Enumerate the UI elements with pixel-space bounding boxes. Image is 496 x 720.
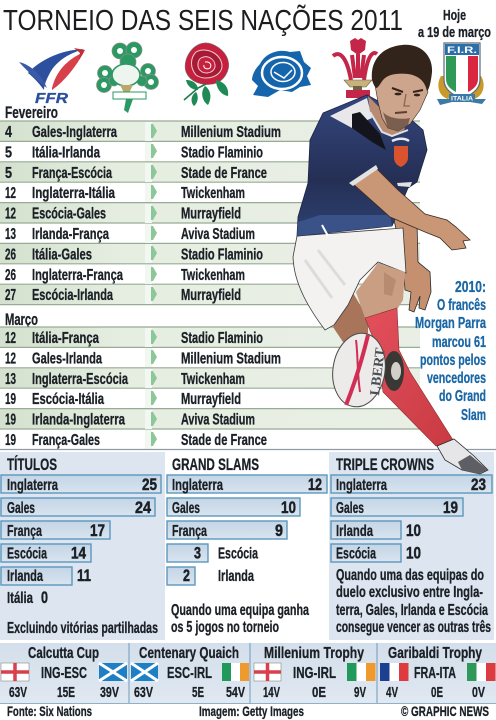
boot: [437, 439, 488, 474]
row: 19 Irlanda-Inglaterra: 19: [5, 412, 16, 429]
row: 13 Irlanda-França: [5, 226, 255, 243]
bar: Escócia 3: Escócia: [218, 546, 258, 562]
logo: Wales feathers: [333, 38, 377, 98]
row: 12 Gales-Irlanda: [5, 350, 281, 367]
note: triple crowns: [336, 567, 491, 636]
row: 26 Itália-Gales: Itália-Gales: [32, 246, 92, 263]
row: 12 Itália-França: [5, 330, 263, 347]
trophy: Centenary Quaich: 63V: [134, 684, 153, 701]
trophy: Centenary Quaich: 54V: [226, 684, 245, 701]
row: 12 Itália-França: Itália-França: [32, 330, 99, 347]
row: 5 Itália-Irlanda: 5: [5, 144, 12, 161]
row: 26 Itália-Gales: Stadio Flaminio: [181, 246, 263, 263]
bar: Gales 19: [331, 498, 463, 517]
note: grand slams: Quando uma equipa ganha: [171, 602, 309, 619]
bar: Inglaterra 23: [331, 475, 492, 494]
row: 27 Escócia-Irlanda: Escócia-Irlanda: [32, 287, 113, 304]
eyes, nose and mouth: [392, 88, 423, 113]
row: 13 Irlanda-França: Irlanda-França: [32, 226, 109, 243]
row: 12 Escócia-Gales: Murrayfield: [181, 206, 241, 223]
row: 26 Inglaterra-França: Twickenham: [181, 267, 245, 284]
bar: Gales 24: Gales: [7, 500, 35, 517]
row: 13 Irlanda-França: Aviva Stadium: [181, 226, 255, 243]
trophy: Centenary Quaich: Centenary Quaich: [139, 645, 239, 662]
trophy: Centenary Quaich: [131, 645, 249, 701]
row: 19 França-Gales: [5, 432, 267, 449]
callout: Morgan Parra: [415, 279, 486, 424]
trophy: Millenium Trophy: ING-IRL: [293, 665, 336, 682]
bar: Gales 10: [167, 498, 300, 517]
row: 12 Escócia-Gales: 12: [5, 206, 16, 223]
heading: Março: Março: [5, 310, 38, 329]
date note: Hoje: [443, 8, 466, 24]
trophy: Garibaldi Trophy: FRA-ITA: [414, 665, 456, 682]
trophy: Calcutta Cup: Calcutta Cup: [28, 645, 99, 662]
standing leg: [333, 293, 368, 342]
logo: France FFR: [19, 48, 85, 107]
bar: Inglaterra 25: Inglaterra: [7, 477, 58, 494]
trophy: Garibaldi Trophy: 0V: [472, 684, 485, 701]
bar: Irlanda 10: [331, 521, 421, 540]
bar: Irlanda 2: Irlanda: [218, 568, 254, 585]
shorts: [293, 228, 406, 330]
bar: Inglaterra 23: Inglaterra: [336, 477, 387, 494]
note: titulos: Excluindo vitórias partilhadas: [7, 620, 158, 637]
bar: Gales 19: Gales: [336, 500, 364, 517]
row: 19 Escócia-Itália: Escócia-Itália: [32, 391, 104, 408]
row: 5 França-Escócia: Stade de France: [181, 165, 267, 182]
panel: titulos: [0, 450, 496, 640]
bar: Inglaterra 12: 12: [308, 475, 322, 494]
neck: [368, 96, 408, 136]
bar: Inglaterra 12: Inglaterra: [172, 477, 223, 494]
row: 19 Escócia-Itália: Murrayfield: [181, 391, 241, 408]
row: 26 Itália-Gales: 26: [5, 246, 16, 263]
row: 19 Irlanda-Inglaterra: [5, 412, 255, 429]
trophy: Millenium Trophy: 9V: [354, 684, 366, 701]
bar: Gales 24: 24: [135, 498, 151, 517]
row: 4 Gales-Inglaterra: [5, 124, 281, 141]
bar: Irlanda 11: Irlanda: [7, 568, 43, 585]
fixtures table: February: [0, 121, 420, 305]
row: 5 Itália-Irlanda: Stadio Flaminio: [181, 144, 263, 161]
heading: triple crowns: TRIPLE CROWNS: [336, 455, 434, 474]
row: 19 Irlanda-Inglaterra: Aviva Stadium: [181, 412, 255, 429]
note: grand slams: os 5 jogos no torneio: [171, 619, 279, 636]
row: 19 França-Gales: 19: [5, 432, 16, 449]
bar: Inglaterra 25: [1, 475, 161, 494]
row: 27 Escócia-Irlanda: 27: [5, 287, 16, 304]
trophy: Centenary Quaich: 5E: [192, 684, 204, 701]
row: 4 Gales-Inglaterra: 4: [5, 124, 12, 141]
row: 12 Gales-Irlanda: Gales-Irlanda: [32, 350, 102, 367]
bar: Inglaterra 23: 23: [471, 475, 486, 494]
date note: [418, 8, 491, 41]
trophy: Millenium Trophy: 14V: [263, 684, 280, 701]
row: 12 Inglaterra-Itália: Twickenham: [181, 185, 245, 202]
panel: trophies strip: [0, 643, 496, 704]
bar: Gales 24: [1, 498, 155, 517]
bar: França 17: [1, 521, 110, 540]
panel: triple crowns: [329, 452, 494, 640]
row: 13 Inglaterra-Escócia: Inglaterra-Escócia: [32, 371, 128, 388]
jersey crest: [394, 146, 408, 167]
row: 12 Inglaterra-Itália: 12: [5, 185, 16, 202]
heading: grand slams: GRAND SLAMS: [172, 455, 259, 474]
bar: Escócia 10: 10: [406, 544, 421, 562]
bar: Irlanda 10: Irlanda: [336, 523, 373, 540]
note: grand slams: [171, 602, 309, 636]
logo: Italy FIR shield: [437, 43, 486, 105]
row: 19 França-Gales: Stade de France: [181, 432, 267, 449]
bar: França 17: 17: [90, 521, 105, 540]
row: 13 Irlanda-França: 13: [5, 226, 16, 243]
panel: grand slams: [167, 455, 327, 636]
bar: França 9: [167, 521, 287, 540]
trophy: Calcutta Cup: 15E: [57, 684, 75, 701]
upper boot at ball: [384, 351, 404, 391]
logo: France FFR: FFR: [35, 90, 68, 107]
row: 26 Inglaterra-França: 26: [5, 267, 16, 284]
footer credits: [7, 703, 489, 719]
row: 12 Itália-França: 12: [5, 330, 16, 347]
trophy: Millenium Trophy: Millenium Trophy: [264, 645, 364, 662]
bar: França 9: 9: [275, 521, 283, 540]
logo: Scotland thistle: [252, 51, 311, 97]
logo: England rose: [184, 43, 229, 106]
footer credits: Fonte: Six Nations: [7, 703, 92, 719]
trophy: Calcutta Cup: 63V: [9, 684, 27, 701]
row: 12 Itália-França: Stadio Flaminio: [181, 330, 263, 347]
bar: Inglaterra 12: [167, 475, 327, 494]
bar: Irlanda 11: 11: [77, 566, 91, 585]
bar: Irlanda 2: 2: [183, 566, 190, 585]
row: 12 Inglaterra-Itália: [5, 185, 245, 202]
fixtures table: March: [0, 327, 420, 449]
row: 12 Escócia-Gales: [5, 206, 241, 223]
trophy: Centenary Quaich: ESC-IRL: [167, 665, 212, 682]
bar: Irlanda 11: [1, 566, 91, 585]
trophy: Garibaldi Trophy: 4V: [386, 684, 398, 701]
rugby ball: LBERT: [368, 346, 389, 396]
row: 5 França-Escócia: 5: [5, 165, 12, 182]
value: Itália 0: 0: [41, 588, 48, 607]
bar: Gales 19: 19: [443, 498, 458, 517]
bar: Inglaterra 25: 25: [142, 475, 157, 494]
row: 12 Gales-Irlanda: Millenium Stadium: [181, 350, 281, 367]
beard: [383, 112, 410, 131]
heading: titulos: TÍTULOS: [7, 455, 57, 474]
jersey: [297, 95, 427, 236]
callout: Morgan Parra: 2010:: [455, 279, 486, 296]
row: 12 Escócia-Gales: Escócia-Gales: [32, 206, 106, 223]
title: TORNEIO DAS SEIS NAÇÕES 2011: [3, 5, 403, 37]
rear arm and hand: [393, 215, 431, 312]
row: 26 Inglaterra-França: Inglaterra-França: [32, 267, 123, 284]
row: 4 Gales-Inglaterra: Gales-Inglaterra: [32, 124, 117, 141]
trophy: Calcutta Cup: ING-ESC: [41, 665, 87, 682]
bar: Escócia 10: Escócia: [336, 546, 376, 562]
player photo illustration: [293, 45, 488, 474]
row: 4 Gales-Inglaterra: Millenium Stadium: [181, 124, 281, 141]
logo: Italy FIR shield: F.I.R.: [447, 45, 477, 56]
bar: Gales 10: Gales: [172, 500, 200, 517]
footer credits: Imagem: Getty Images: [199, 703, 304, 719]
bar: Escócia 10: [331, 544, 421, 562]
bar: Escócia 3: 3: [194, 544, 201, 562]
trophy: Millenium Trophy: 0E: [312, 684, 326, 701]
row: 5 França-Escócia: [5, 165, 267, 182]
trophy: Calcutta Cup: [1, 645, 127, 701]
collar: [370, 112, 408, 136]
row: 12 Inglaterra-Itália: Inglaterra-Itália: [32, 185, 115, 202]
row: 27 Escócia-Irlanda: [5, 287, 241, 304]
head: [375, 72, 428, 131]
trophy: Garibaldi Trophy: [380, 645, 496, 701]
logo: Italy FIR shield: ITALIA: [451, 96, 473, 102]
heading: Fevereiro: Fevereiro: [5, 103, 58, 122]
row: 27 Escócia-Irlanda: Murrayfield: [181, 287, 241, 304]
rugby ball: [328, 329, 390, 411]
value: Itália 0: Itália: [7, 590, 33, 607]
row: 13 Inglaterra-Escócia: 13: [5, 371, 16, 388]
row: 5 Itália-Irlanda: Itália-Irlanda: [32, 144, 100, 161]
bar: Escócia 14: Escócia: [7, 546, 47, 562]
trophy: Millenium Trophy: [254, 645, 376, 701]
trophy: Calcutta Cup: 39V: [100, 684, 119, 701]
row: 13 Inglaterra-Escócia: [5, 371, 245, 388]
front arm: [352, 167, 470, 250]
hair: [372, 45, 432, 91]
row: 5 França-Escócia: França-Escócia: [32, 165, 112, 182]
row: 19 Irlanda-Inglaterra: Irlanda-Inglaterra: [32, 412, 125, 429]
bar: Irlanda 10: 10: [406, 521, 421, 540]
bar: Escócia 14: [1, 544, 91, 562]
trophy: Garibaldi Trophy: 0E: [431, 684, 443, 701]
red sock: [365, 308, 453, 446]
bar: Escócia 3: [167, 544, 258, 562]
row: 26 Inglaterra-França: [5, 267, 245, 284]
row: 5 Itália-Irlanda: [5, 144, 263, 161]
row: 12 Gales-Irlanda: 12: [5, 350, 16, 367]
bar: Escócia 14: 14: [71, 544, 86, 562]
row: 19 França-Gales: França-Gales: [32, 432, 100, 449]
row: 26 Itália-Gales: [5, 246, 263, 263]
bar: França 9: França: [172, 523, 207, 540]
row: 19 Escócia-Itália: [5, 391, 241, 408]
bar: França 17: França: [7, 523, 42, 540]
kicking leg thigh: [356, 263, 405, 318]
logo: Ireland shamrock: [96, 42, 158, 113]
row: 13 Inglaterra-Escócia: Twickenham: [181, 371, 245, 388]
bar: Irlanda 2: [167, 566, 254, 585]
bar: Gales 10: 10: [281, 498, 296, 517]
row: 19 Escócia-Itália: 19: [5, 391, 16, 408]
